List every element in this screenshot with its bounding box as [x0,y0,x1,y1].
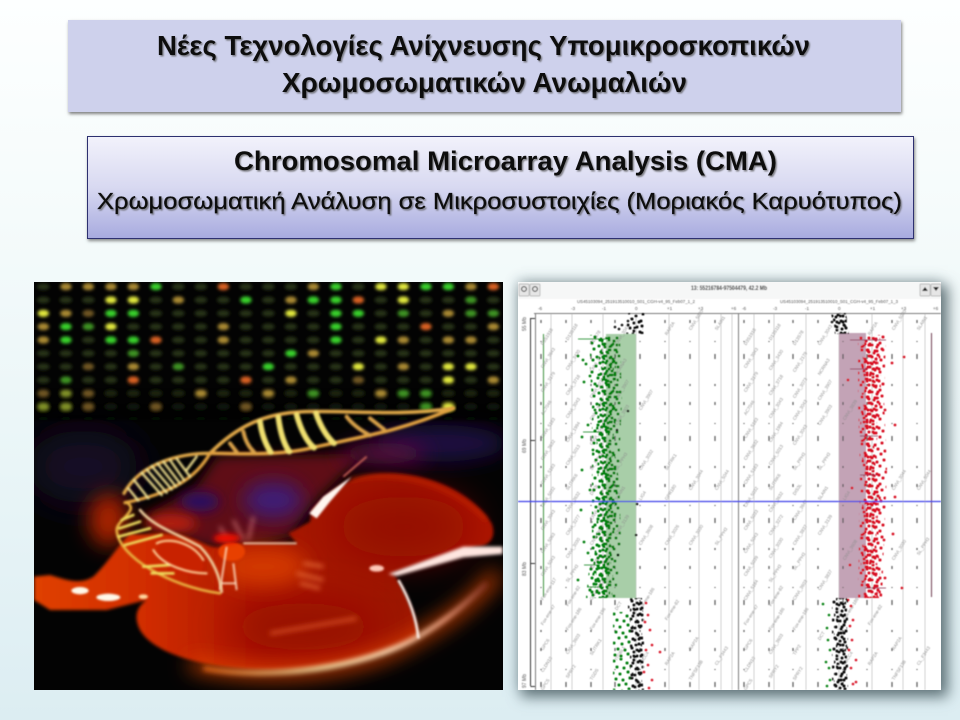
heading: CMA text: Chromosomal Microarray Analysis (CMA) [234,146,777,176]
probe labels: CNVi_3043 [817,323,833,346]
probe labels: CNVi_1994 [565,420,581,443]
probe labels: CNVi_3903 [614,403,630,426]
probe labels: CNVi_5032 [540,485,556,508]
sample headers and log ratio axis: US45103094_251913510010_S01_CGH-v4_95_Feb07_1_2 [577,299,695,304]
probe labels: SLITRK6 [768,472,782,491]
sample headers and log ratio axis: 0 [838,306,841,311]
probe labels: CNVi_3718 [565,373,581,396]
probe labels: CNVi_5183 [743,462,759,485]
probe labels: CNVi_5013 [565,443,581,466]
probe labels: D13S118 [768,322,782,341]
probe labels: CNVi_3044 [891,468,907,491]
probe labels: CNVi_2179 [792,350,808,373]
sample headers and log ratio axis: -1 [602,306,607,311]
duplication shaded region (rose) [839,333,866,598]
probe labels: CNVi_3907 [817,378,833,401]
chart: array CGH plot [518,282,941,690]
sample headers and log ratio axis: US45103094_251913510010_S01_CGH-v4_95_Feb07_1_3 [780,299,898,304]
probe labels: CLDN10 [743,655,756,673]
probe labels: D13S118 [565,322,579,341]
probe labels: SL_PPH3 [589,451,604,471]
probe labels: CNVi_5183 [743,416,759,439]
probe labels: SL_PPH3 [565,563,580,583]
probe labels: CNVi_3179 [589,350,605,373]
probe labels: NCRNA3 [817,357,831,376]
probe labels: CNVi_3608 [638,523,654,546]
probe labels: CNVi_3043 [792,398,808,421]
probe labels: CNVi_3430 [565,348,581,371]
probe labels: SLITRK6 [565,472,579,491]
probe labels: CNVi_5032 [743,485,759,508]
probe labels: RAP2A [664,321,676,336]
probe labels: CNVi_3139 [817,513,833,536]
purple and maroon haze [27,425,507,547]
panel: CMA subtitle [87,136,914,239]
toolbar with zoom and arrow buttons: 13: 55216784-97504479, 42.2 Mb [691,285,767,292]
probe labels: CNVi_5013 [768,443,784,466]
probe labels: CNVi_5030 [688,308,704,331]
green deletion probe dots [578,335,622,598]
probe labels: ABCC4 [842,650,854,666]
genomic position axis [522,317,535,688]
probe labels: CNVi_3179 [743,370,759,393]
probe labels: CNVi_3907 [614,378,630,401]
probe labels: CNVi_3043 [589,398,605,421]
probe labels: TNFSF13B [891,659,907,681]
probe labels: SLITRK1 [664,452,678,471]
glowing highlights [71,457,503,673]
blue cursor line [518,500,941,502]
probe labels: Fox-ene-82 [664,598,680,621]
probe labels: LIG4 [638,490,647,501]
probe labels: CNVi_3043 [768,396,784,419]
probe labels: SPRY2 [768,663,780,679]
probe labels: Fox-ene-82 [768,584,784,607]
sample headers and log ratio axis: -3 [571,306,576,311]
probe labels: CNVi_3139 [614,513,630,536]
probe labels: SL_PPH3 [817,451,832,471]
probe labels: CNVi_3603 [565,632,581,655]
probe labels: Fox-ene-186 [638,586,656,611]
probe labels: CNVi_3632 [589,523,605,546]
probe labels: Fox-ene-117 [540,577,558,601]
probe labels: CNVi_1994 [768,420,784,443]
probe labels: ITGBL1 [614,645,626,661]
probe labels: CNVi_3032 [638,448,654,471]
probe labels: CNVi_5030 [891,308,907,331]
sample headers and log ratio axis [538,299,939,311]
image: microarray, DNA helix and fetus [34,282,503,690]
probe labels: CNVi_3903 [817,403,833,426]
probe labels: CNVi_5033 [743,508,759,531]
probe labels: RAP2A [891,636,903,651]
probe labels: CNVi_3718 [768,373,784,396]
probe labels: SPRY2 [792,665,804,681]
sample headers and log ratio axis: -6 [742,306,747,311]
probe labels: GPR180 [664,483,677,501]
sample headers and log ratio axis: +3 [698,306,704,311]
probe labels: DCT [614,600,623,611]
probe labels: TGDS [589,668,600,681]
sample headers and log ratio axis: 0 [635,306,638,311]
black normal probes and mixed tails [613,313,856,690]
genomic position axis: 55 Mb [522,317,528,331]
DNA helix [117,408,453,593]
probe labels: D3S1918 [540,327,554,346]
probe labels: Fox-ene-82 [867,603,883,626]
probe labels: SLAIN1 [817,485,829,501]
probe labels: CNVi_5184 [743,578,759,601]
red duplication probe dots [848,335,904,600]
probe labels: CNVi_3632 [565,490,581,513]
probe labels: CNVi_3043 [792,423,808,446]
probe labels: CNVi_3643 [589,498,605,521]
probe labels: Fox-ene-47 [540,603,556,626]
probe labels: SL_PPH3 [792,551,807,571]
sample headers and log ratio axis: +6 [933,306,939,311]
probe labels: CNVi_3073 [589,376,605,399]
probe labels: SL_PPH3 [792,451,807,471]
sample headers and log ratio axis: -1 [805,306,810,311]
probe labels: CNVi_3030 [891,538,907,561]
probe labels: CNVi_3030 [565,536,581,559]
sample headers and log ratio axis: +1 [667,306,673,311]
probe labels: SLITRK1 [867,492,881,511]
probe labels: CL_F3443 [916,645,931,666]
probe labels: CNVi_3043 [589,423,605,446]
probe labels: CNVi_3043 [743,346,759,369]
probe labels: D13S78 [589,329,602,346]
probe labels: CNVi_3179 [540,370,556,393]
sample headers and log ratio axis: -6 [538,306,543,311]
sample headers and log ratio axis: -3 [773,306,778,311]
probe labels: CNVi_3043 [540,508,556,531]
probe labels: Fox-ene-196 [589,606,607,631]
probe labels: DCT [817,630,826,641]
probe labels: CNVi_3643 [792,498,808,521]
probe labels: CNVi_5013 [589,578,605,601]
probe labels: CNVi_5183 [540,416,556,439]
probe labels: NCRNA3 [614,357,628,376]
probe labels: SL_PPH3 [614,451,629,471]
probe labels: TPP2 [792,643,802,656]
probe labels: CNVi_3026 [664,523,680,546]
heading: CMA text: Χρωμοσωματική Ανάλυση σε Μικροσυστοιχίες (Μοριακός Καρυότυπος) [97,188,902,214]
probe labels: RAP2A [688,636,700,651]
probe labels: SL_PPH3 [916,536,931,556]
probe labels: CNVi_3643 [540,346,556,369]
probe labels: CNVi_5043 [540,554,556,577]
deletion shaded region (green) [606,334,636,598]
probe labels: TNFSF13B [688,659,704,681]
genomic position axis: 97 Mb [522,674,528,688]
grid lines [551,313,925,690]
probe labels: CNVi_3608 [842,538,858,561]
probe labels: CNVi_3837 [817,568,833,591]
probe labels: Fox-ene-186 [565,606,583,631]
probe labels: CNVi_3272 [768,513,784,536]
probe tick marks [541,320,917,690]
genomic position axis: 69 Mb [522,439,528,453]
probe labels: SPRY2 [565,663,577,679]
probe labels: D13S78 [792,329,805,346]
probe labels: CNVi_3044 [688,468,704,491]
right segment marker [930,333,932,597]
probe labels: Fox-ene-47 [743,603,759,626]
probe labels: RAP2A [867,651,879,666]
probe labels: RAP2A [867,321,879,336]
probe labels: CNVi_5044 [714,468,730,491]
microarray spots [34,280,503,420]
probe labels: CNVi_3030 [688,523,704,546]
probe labels: SL_PPH3 [768,563,783,583]
probe labels: CNVi_5183 [540,462,556,485]
probe labels: CNVi_3632 [768,490,784,513]
probe labels: SLAIN1 [714,315,726,331]
probe labels: CNVi_3603 [792,578,808,601]
sample headers and log ratio axis: +1 [870,306,876,311]
probe labels: DIS3L [589,482,600,496]
probe labels [540,308,932,691]
probe labels: CNVi_3632 [540,438,556,461]
probe labels: CNVi_5043 [743,531,759,554]
probe labels: CNVi_3632 [743,438,759,461]
probe labels: LIG4 [842,490,851,501]
probe labels: Fox-ene-186 [842,596,860,621]
probe labels: AC7046 [540,399,553,416]
probe labels: GPC6 [743,638,754,651]
probe labels: AC7046 [743,399,756,416]
probe labels: D3S1918 [743,327,757,346]
probe labels: CNVi_3907 [638,388,654,411]
probe labels: CLDN10 [540,655,553,673]
probe labels: SLAIN1 [614,485,626,501]
heading: CMA text [97,146,903,216]
segment marker lines [542,334,544,597]
heading: main title [157,30,811,100]
heading: main title: Νέες Τεχνολογίες Ανίχνευσης Υπομικροσκοπικών [157,30,810,61]
toolbar with zoom and arrow buttons [518,282,941,299]
probe labels: ABCC4 [638,650,650,666]
panel: title [68,20,901,112]
probe labels: Fox-ene-186 [792,606,810,631]
probe labels: CNVi_3043 [565,396,581,419]
sample headers and log ratio axis: +6 [731,306,737,311]
probe labels: SLITRK5 [589,552,603,571]
heading: main title: Χρωμοσωματικών Ανωμαλιών [282,67,687,98]
probe labels: Fox-ene-82 [565,584,581,607]
probe labels: CNVi_3603 [768,632,784,655]
probe labels: CL_F3443 [714,645,729,666]
genomic position axis: 83 Mb [522,562,528,576]
image backdrop [34,282,503,690]
probe labels: RAP2A [664,651,676,666]
probe labels: CNVi_3030 [768,536,784,559]
probe labels: SLAIN1 [916,315,928,331]
probe labels: CNVi_5063 [540,531,556,554]
probe labels: CNVi_3430 [768,348,784,371]
probe labels: DIS3L [792,482,803,496]
probe labels: CNVi_3277 [565,513,581,536]
probe labels: Fox-ene-186 [768,606,786,631]
probe labels: CNVi_3073 [792,376,808,399]
probe labels: CNVi_3839 [842,398,858,421]
probe labels: SL_PPH3 [714,526,729,546]
probe labels: GPC6 [540,638,551,651]
probe labels: CNVi_3043 [614,323,630,346]
probe labels: CNVi_3837 [792,523,808,546]
probe labels: CNVi_5039 [743,554,759,577]
fetus body [34,473,493,670]
probe labels: CNVi_5044 [916,468,932,491]
sample headers and log ratio axis: +3 [901,306,907,311]
probe labels: SLITRK1 [589,637,603,656]
